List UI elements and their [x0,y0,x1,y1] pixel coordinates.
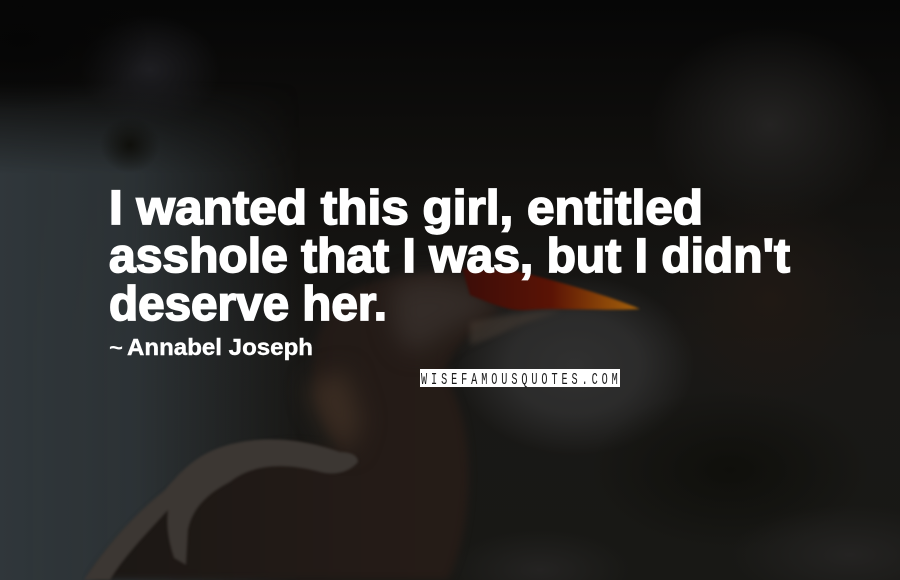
egret silhouette [84,268,640,580]
author attribution: Annabel Joseph [127,334,313,360]
watermark: WISEFAMOUSQUOTES.COM [421,371,618,390]
head highlight [392,279,500,350]
neck warm light [308,370,362,452]
orange beak [462,268,640,310]
author attribution: ~ [109,335,123,360]
quote text: deserve her. [109,278,387,331]
quote text [109,182,790,331]
bird head and body [90,274,500,580]
wing edge [84,439,358,580]
quote text: asshole that I was, but I didn't [109,230,790,283]
quote text: I wanted this girl, entitled [109,182,703,235]
lower beak speckle [470,311,562,345]
